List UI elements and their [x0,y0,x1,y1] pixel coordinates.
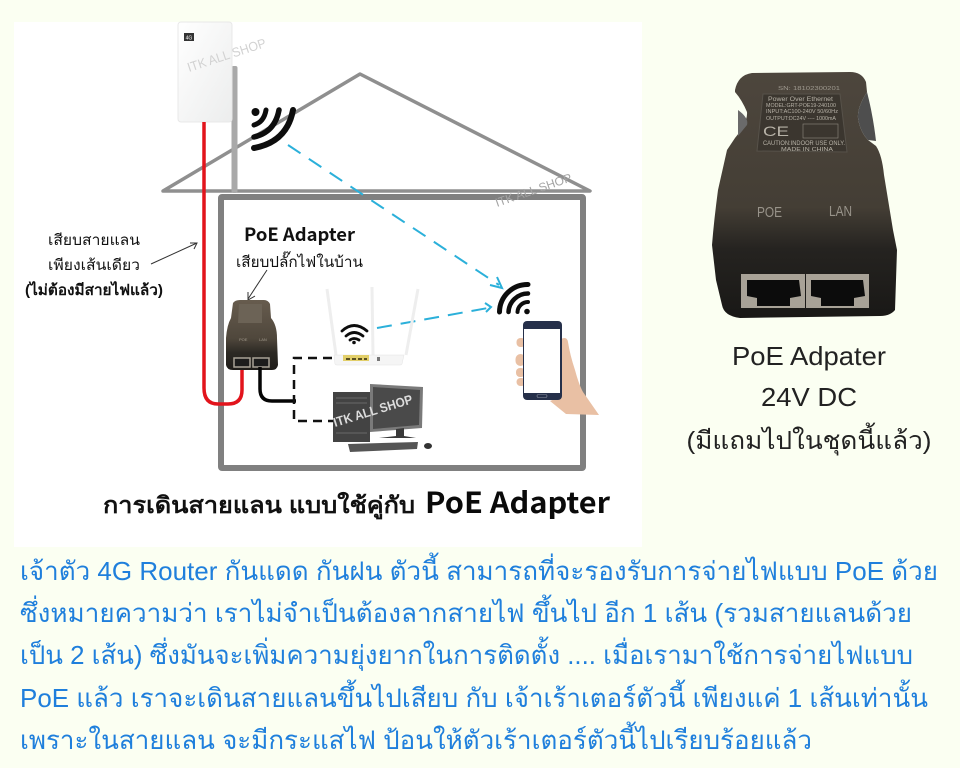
callout: single LAN cable: เพียงเส้นเดียว [48,257,140,274]
indoor wifi router [327,287,418,365]
label: PoE Adapter: เสียบปลั๊กไฟในบ้าน [236,251,363,271]
wifi dashed arrow from indoor router [377,303,491,328]
wifi dashed arrow from roof [288,145,502,288]
description paragraph: เป็น 2 เส้น) ซึ่งมันจะเพิ่มความยุ่งยากในการติดตั้ง .... เมื่อเรามาใช้การจ่ายไฟแบบ [20,636,913,671]
icon: indoor router wifi [342,326,367,344]
adapter caption: 24V DC [761,382,857,412]
adapter caption: PoE Adpater [732,341,886,371]
desktop computer [331,384,432,452]
adapter spec label: CAUTION:INDOOR USE ONLY. [763,141,845,147]
ethernet ports [741,274,869,308]
outdoor 4G router: 4G [186,36,192,42]
small PoE adapter: LAN [259,337,267,342]
watermark on wall: ITK ALL SHOP [493,171,574,210]
callout: single LAN cable: (ไม่ต้องมีสายไฟแล้ว) [25,280,163,299]
diagram caption: PoE Adapter [425,480,610,522]
serial number: SN: 18102300201 [778,86,840,92]
icon: outdoor wifi signal [252,108,293,148]
description paragraph: เจ้าตัว 4G Router กันแดด กันฝน ตัวนี้ สามารถที่จะรองรับการจ่ายไฟแบบ PoE ด้วย [20,552,938,586]
small PoE adapter: POE [239,337,248,342]
adapter spec label: OUTPUT:DC24V ---- 1000mA [766,116,837,122]
smartphone [523,321,562,400]
adapter caption: (มีแถมไปในชุดนี้แล้ว) [686,422,932,456]
icon: phone wifi [500,284,530,314]
adapter spec label [763,96,845,153]
watermark top: ITK ALL SHOP [185,35,268,75]
house walls [221,197,583,468]
mast pole [232,66,238,193]
description paragraph: เพราะในสายแลน จะมีกระแสไฟ ป้อนให้ตัวเร้าเตอร์ตัวนี้ไปเรียบร้อยแล้ว [20,721,812,755]
house roof [163,74,590,191]
callout: single LAN cable: เสียบสายแลน [48,232,140,249]
black LAN cable [260,367,296,401]
description paragraph [20,552,938,755]
label: PoE Adapter [236,221,363,300]
diagram caption: การเดินสายแลน แบบใช้คู่กับ [103,491,415,520]
description paragraph: PoE แล้ว เราจะเดินสายแลนขึ้นไปเสียบ กับ เจ้าเร้าเตอร์ตัวนี้ เพียงแค่ 1 เส้นเท่านั้น [20,679,928,713]
adapter caption [686,341,932,456]
adapter spec label: MADE IN CHINA [781,147,833,153]
adapter spec label: CE [763,123,789,139]
port labels: POE [757,204,782,221]
adapter spec label: INPUT:AC100-240V 50/60Hz [766,109,839,115]
panel: PoE wiring diagram [14,22,642,547]
outdoor 4G router [178,22,232,122]
diagram caption [103,480,610,522]
hand holding phone [516,338,599,415]
description paragraph: ซึ่งหมายความว่า เราไม่จำเป็นต้องลากสายไฟ ขึ้นไป อีก 1 เส้น (รวมสายแลนด้วย [20,594,912,628]
adapter spec label: Power Over Ethernet [768,96,833,103]
watermark on computer: ITK ALL SHOP [331,391,415,430]
dashed network cabling [294,358,334,421]
label: PoE Adapter: PoE Adapter [244,221,355,247]
callout: single LAN cable [25,232,197,299]
red LAN cable [204,122,242,404]
large PoE adapter photo [712,72,897,318]
adapter spec label: MODEL:GRT-POE19-240100 [766,103,836,109]
large PoE adapter photo: LAN [829,203,852,220]
small PoE adapter [226,300,278,370]
